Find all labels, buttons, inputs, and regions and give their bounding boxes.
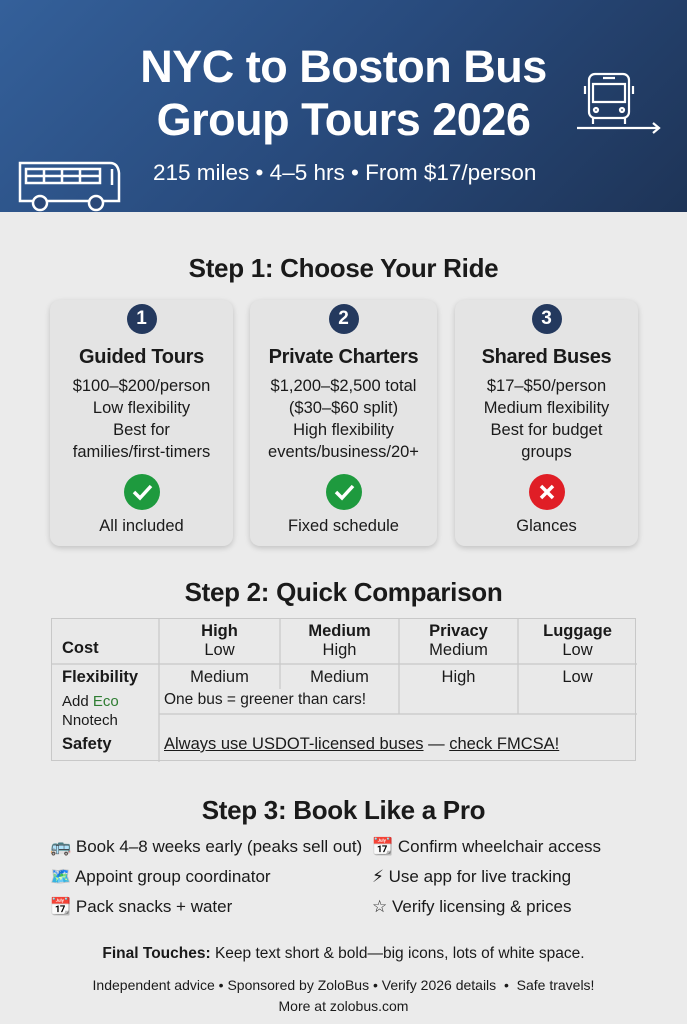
footer: Independent advice • Sponsored by ZoloBus • Verify 2026 details • Safe travels! [93, 977, 594, 993]
comparison table: Medium [429, 641, 488, 659]
icon: bus side [18, 162, 120, 212]
panel: private charters: Private Charters [269, 346, 418, 368]
comparison table: Low [204, 641, 235, 659]
comparison table: Low [562, 668, 593, 686]
header banner [0, 0, 687, 212]
icon: bus front with arrow [577, 72, 661, 134]
title: NYC to Boston Bus [140, 41, 547, 92]
panel: guided tours [50, 300, 233, 546]
checklist [50, 836, 601, 916]
icon: check [124, 474, 160, 510]
comparison table: Luggage [543, 622, 612, 640]
comparison table: Cost [62, 639, 99, 657]
final touches: Final Touches: Keep text short & bold—big icons, lots of white space. [102, 945, 585, 962]
title [140, 41, 547, 145]
comparison table: Low [562, 641, 593, 659]
checklist: 🚌 Book 4–8 weeks early (peaks sell out) [50, 837, 362, 856]
panel: private charters: Fixed schedule [288, 517, 399, 535]
panel: guided tours: Low flexibility [93, 399, 190, 417]
panel: shared buses [455, 300, 638, 546]
title: Group Tours 2026 [157, 94, 530, 145]
panel: shared buses: Shared Buses [482, 346, 611, 368]
panel: private charters: High flexibility [293, 421, 394, 439]
comparison table: Medium [308, 622, 371, 640]
panel: guided tours: All included [99, 517, 184, 535]
footer: More at zolobus.com [279, 998, 408, 1014]
comparison table: Safety [62, 735, 112, 753]
panel: shared buses: Glances [516, 517, 577, 535]
comparison table: Medium [310, 668, 369, 686]
checklist: 📆 Confirm wheelchair access [372, 837, 601, 856]
panel: shared buses: Medium flexibility [484, 399, 609, 417]
panel: private charters: 2 [338, 308, 349, 329]
comparison table: Medium [190, 668, 249, 686]
comparison table: High [442, 668, 475, 686]
panel: guided tours: $100–$200/person [73, 377, 210, 395]
comparison table: Privacy [429, 622, 488, 640]
heading: step 2: Step 2: Quick Comparison [185, 577, 502, 607]
subtitle: 215 miles • 4–5 hrs • From $17/person [153, 160, 536, 185]
panel: shared buses: 3 [541, 308, 552, 329]
comparison table: Nnotech [62, 712, 118, 729]
icon: check [326, 474, 362, 510]
panel: shared buses: Best for budget [491, 421, 602, 439]
comparison table: One bus = greener than cars! [164, 691, 366, 708]
comparison table: Add Eco [62, 693, 119, 710]
comparison table: High [323, 641, 356, 659]
panel: guided tours: Best for [113, 421, 170, 439]
checklist: ☆ Verify licensing & prices [372, 897, 571, 916]
panel: private charters: events/business/20+ [268, 443, 419, 461]
heading: step 3: Step 3: Book Like a Pro [202, 795, 485, 825]
panel: private charters [250, 300, 437, 546]
comparison table: Flexibility [62, 668, 138, 686]
panel: shared buses: $17–$50/person [487, 377, 606, 395]
panel: shared buses: groups [521, 443, 572, 461]
checklist: 📆 Pack snacks + water [50, 897, 232, 916]
comparison table: Always use USDOT-licensed buses — check FMCSA! [164, 735, 559, 753]
panel: guided tours: Guided Tours [79, 346, 204, 368]
panel: private charters: ($30–$60 split) [289, 399, 398, 417]
comparison table: High [201, 622, 238, 640]
heading: step 1: Step 1: Choose Your Ride [189, 253, 498, 283]
panel: private charters: $1,200–$2,500 total [271, 377, 416, 395]
icon: cross [528, 474, 564, 510]
panel: guided tours: 1 [136, 308, 147, 329]
comparison table [51, 618, 636, 761]
checklist: 🗺️ Appoint group coordinator [50, 867, 271, 886]
panel: guided tours: families/first-timers [73, 443, 210, 461]
checklist: ⚡ Use app for live tracking [372, 867, 571, 886]
footer [93, 977, 594, 1014]
